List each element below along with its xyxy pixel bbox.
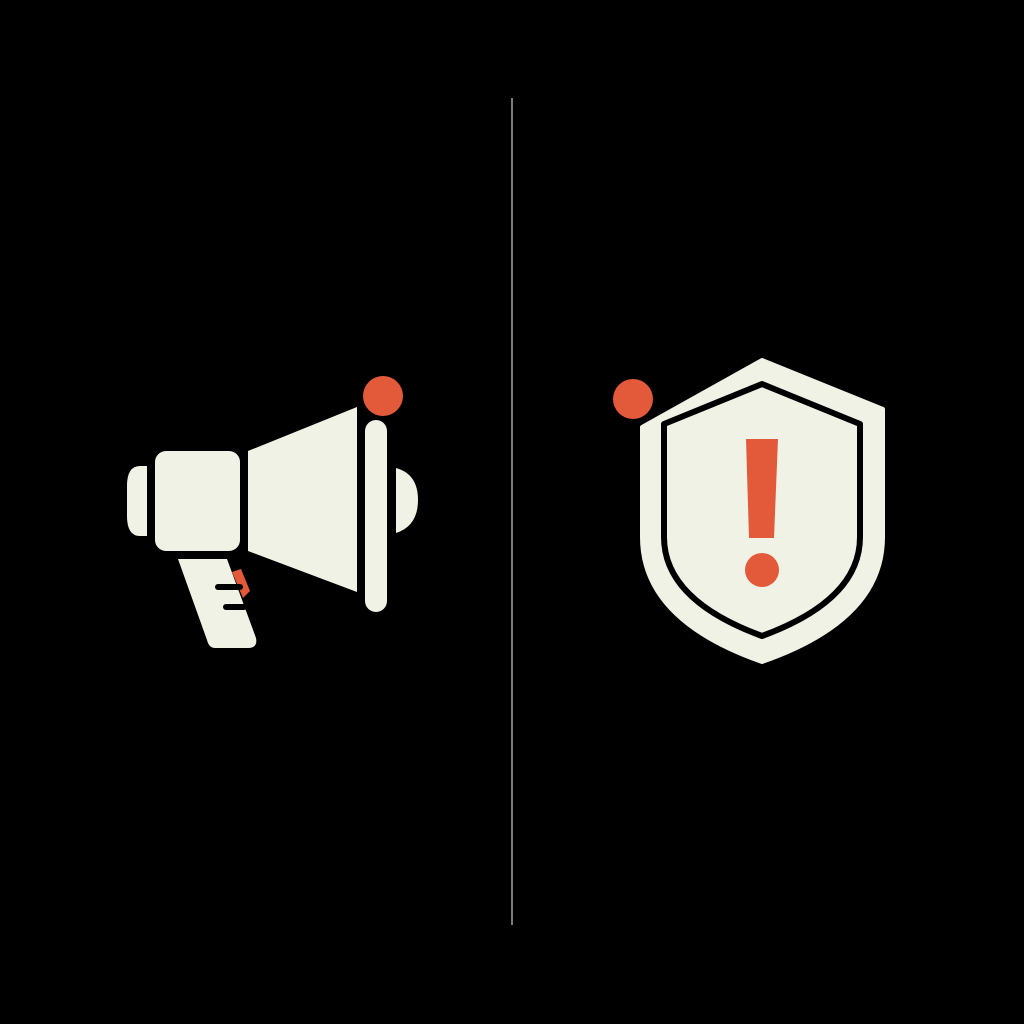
red dot — [363, 376, 403, 416]
icon: megaphone — [127, 376, 418, 648]
icon: shield with exclamation — [607, 360, 883, 662]
trigger — [232, 569, 250, 598]
exclamation mark — [746, 439, 778, 538]
divider line — [511, 98, 513, 925]
red dot — [607, 373, 659, 425]
